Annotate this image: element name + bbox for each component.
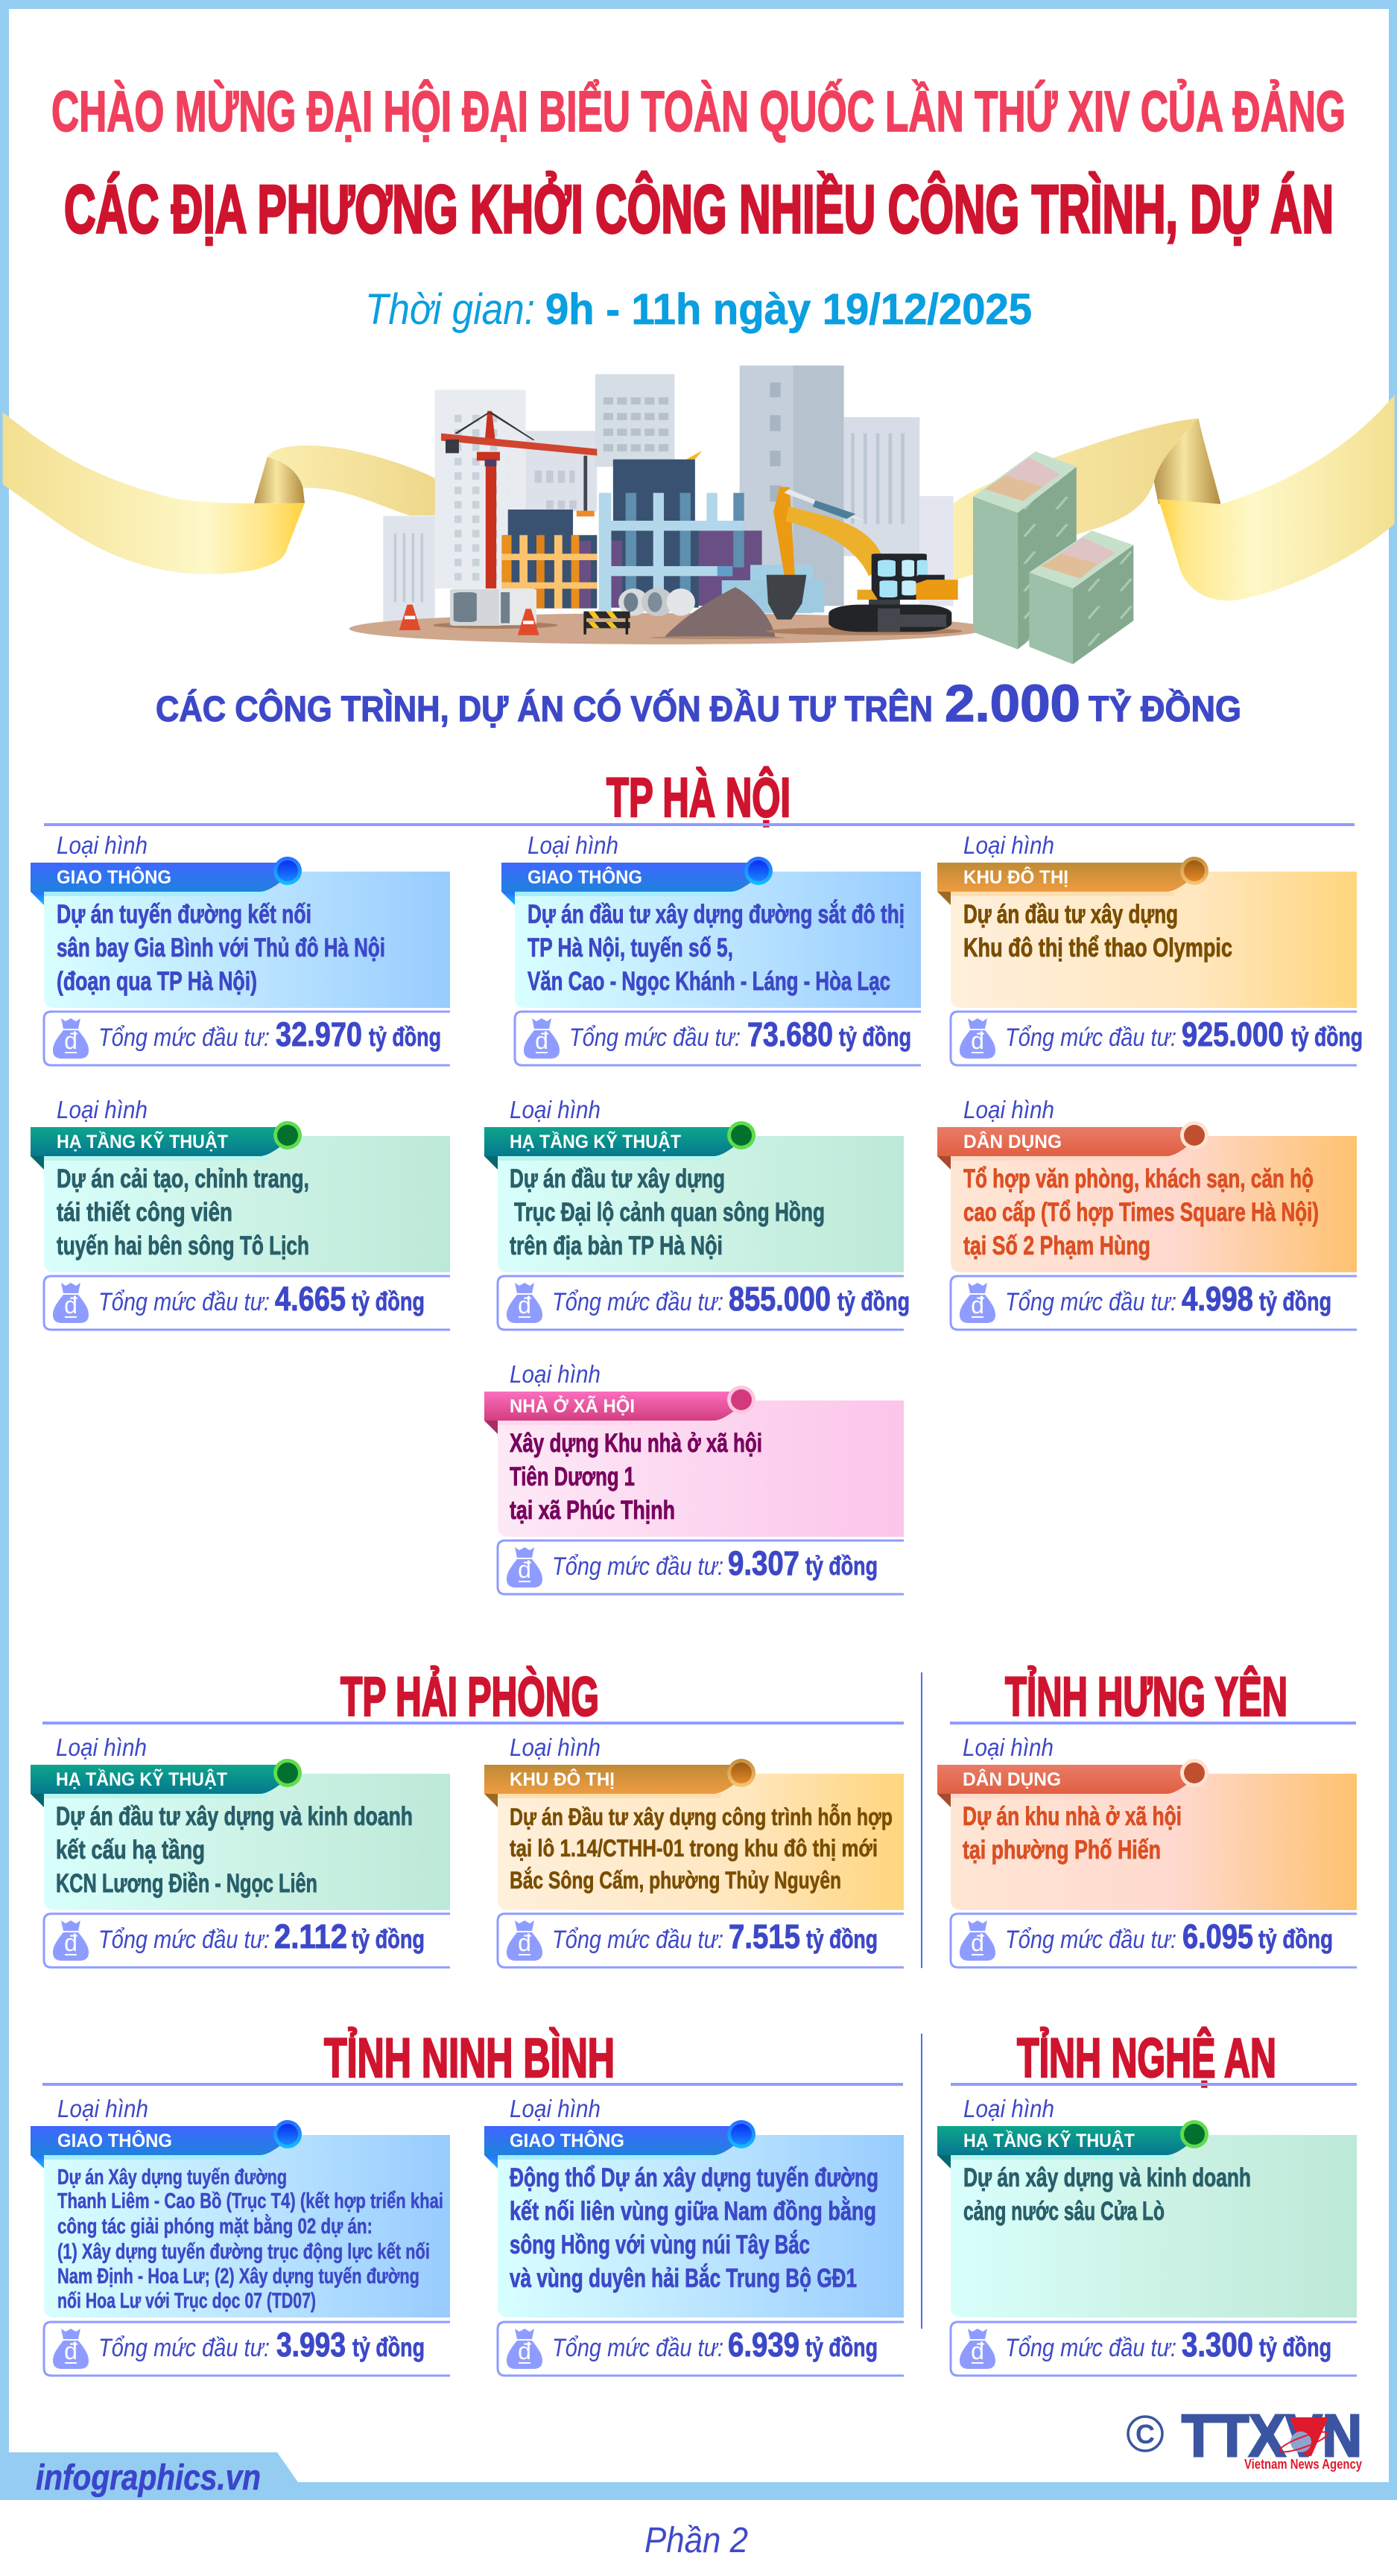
tag: DÂN DỤNG: [963, 1768, 1061, 1790]
project description: kết cấu hạ tầng: [56, 1836, 205, 1865]
total investment: tỷ đồng: [1259, 2333, 1331, 2362]
card: khu đô thị, Bắc Sông Cấm: [484, 1733, 904, 1967]
project description: (1) Xây dựng tuyến đường trục động lực kết nối: [57, 2240, 430, 2264]
total investment: [44, 1012, 450, 1065]
project description: Tiên Dương 1: [510, 1462, 635, 1491]
project description: Dự án đầu tư xây dựng: [510, 1164, 725, 1193]
project description: [57, 2166, 443, 2313]
illustration: ribbons, city construction site and money stacks: [3, 366, 1395, 664]
total investment: Tổng mức đầu tư:: [98, 1926, 270, 1954]
project description: Nam Định - Hoa Lư; (2) Xây dựng tuyến đường: [57, 2265, 419, 2288]
tag: [31, 857, 302, 905]
project description: Dự án đầu tư xây dựng và kinh doanh: [56, 1802, 413, 1831]
label: loại hình: Loại hình: [528, 831, 618, 859]
project description: TP Hà Nội, tuyến số 5,: [528, 933, 733, 962]
label: loại hình: Loại hình: [510, 1360, 601, 1388]
total investment: 6.939: [728, 2326, 799, 2364]
total investment: Tổng mức đầu tư:: [552, 1926, 723, 1954]
tag: [31, 2120, 302, 2169]
total investment: tỷ đồng: [352, 1925, 425, 1954]
logo: TTXVN: Vietnam News Agency: [1244, 2457, 1362, 2472]
total investment: [44, 2322, 450, 2376]
panel: [951, 2135, 1357, 2318]
total investment: tỷ đồng: [1258, 1925, 1333, 1954]
tag: HẠ TẦNG KỸ THUẬT: [56, 1768, 227, 1790]
total investment: [951, 2322, 1357, 2376]
project description: Dự án xây dựng và kinh doanh: [963, 2163, 1251, 2192]
total investment: 2.112: [274, 1917, 347, 1955]
total investment: đ: [64, 1929, 77, 1956]
total investment: 4.998: [1182, 1280, 1253, 1318]
total investment: [951, 1276, 1357, 1330]
label: loại hình: Loại hình: [510, 2095, 601, 2122]
total investment: 73.680: [747, 1015, 833, 1053]
label: loại hình: Loại hình: [963, 2095, 1054, 2122]
label: loại hình: Loại hình: [510, 1096, 601, 1123]
tag: [31, 1759, 302, 1807]
total investment: tỷ đồng: [805, 2333, 878, 2362]
tag: GIAO THÔNG: [57, 2129, 172, 2151]
card: hạ tầng kỹ thuật, sông Tô Lịch: [31, 1096, 450, 1330]
heading: TP Hà Nội: TP HÀ NỘI: [606, 767, 791, 828]
total investment: đ: [971, 1292, 984, 1319]
panel: [44, 1774, 450, 1910]
project description: Văn Cao - Ngọc Khánh - Láng - Hòa Lạc: [528, 967, 890, 996]
subheading: projects over 2,000 billion dong: TỶ ĐỒNG: [1089, 688, 1241, 729]
total investment: 6.095: [1182, 1917, 1253, 1955]
tag: [937, 1759, 1208, 1807]
project description: Khu đô thị thể thao Olympic: [963, 933, 1232, 962]
project description: sân bay Gia Bình với Thủ đô Hà Nội: [57, 933, 385, 962]
tag: [31, 1121, 302, 1170]
total investment: Tổng mức đầu tư:: [98, 2334, 270, 2362]
total investment: đ: [64, 2338, 77, 2364]
total investment: tỷ đồng: [806, 1925, 878, 1954]
total investment: [951, 1012, 1363, 1065]
total investment: tỷ đồng: [352, 1287, 425, 1316]
tag: NHÀ Ở XÃ HỘI: [510, 1395, 635, 1417]
project description: Dự án khu nhà ở xã hội: [963, 1802, 1182, 1831]
panel: [44, 872, 450, 1008]
label: loại hình: Loại hình: [57, 831, 148, 859]
panel: [515, 872, 921, 1008]
heading: TP Hải Phòng: TP HẢI PHÒNG: [340, 1666, 599, 1728]
total investment: đ: [64, 1027, 77, 1054]
card: hạ tầng kỹ thuật, trục đại lộ sông Hồng: [484, 1096, 910, 1330]
project description: [510, 2163, 878, 2293]
tag: [484, 1121, 755, 1170]
subheading: projects over 2,000 billion dong: [156, 674, 1241, 732]
subheading: projects over 2,000 billion dong: CÁC CÔNG TRÌNH, DỰ ÁN CÓ VỐN ĐẦU TƯ TRÊN: [156, 688, 933, 729]
project description: (đoạn qua TP Hà Nội): [57, 967, 257, 996]
project description: cảng nước sâu Cửa Lò: [963, 2197, 1165, 2226]
tag: GIAO THÔNG: [57, 866, 171, 888]
project description: tại xã Phúc Thịnh: [510, 1496, 675, 1525]
total investment: 855.000: [729, 1280, 831, 1318]
tag: [484, 1386, 755, 1434]
panel: [44, 1136, 450, 1272]
project description: công tác giải phóng mặt bằng 02 dự án:: [57, 2213, 373, 2239]
project description: Dự án tuyến đường kết nối: [57, 900, 311, 929]
project description: kết nối liên vùng giữa Nam đồng bằng: [510, 2196, 876, 2226]
total investment: Tổng mức đầu tư:: [1005, 1926, 1176, 1954]
tag: [484, 1759, 755, 1807]
project description: tuyến hai bên sông Tô Lịch: [57, 1231, 309, 1260]
total investment: tỷ đồng: [805, 1552, 878, 1581]
project description: [528, 899, 905, 996]
total investment: Tổng mức đầu tư:: [552, 1288, 723, 1316]
label: loại hình: Loại hình: [963, 831, 1054, 859]
panel: [498, 1774, 904, 1910]
total investment: 3.300: [1182, 2326, 1253, 2364]
total investment: Tổng mức đầu tư:: [569, 1024, 741, 1052]
card: giao thông, sân bay Gia Bình: [31, 831, 450, 1065]
card: nhà ở xã hội Tiên Dương 1: [484, 1360, 904, 1594]
project description: [963, 900, 1232, 962]
total investment: 925.000: [1182, 1015, 1284, 1053]
project description: [963, 2163, 1251, 2226]
project description: [57, 1164, 309, 1260]
project description: Dự án Đầu tư xây dựng công trình hỗn hợp: [510, 1803, 893, 1830]
label: loại hình: Loại hình: [963, 1096, 1054, 1123]
total investment: [951, 1914, 1357, 1967]
project description: Bắc Sông Cấm, phường Thủy Nguyên: [510, 1867, 841, 1894]
card: giao thông, động thổ tuyến đường liên vùng: [484, 2095, 904, 2376]
total investment: tỷ đồng: [352, 2333, 425, 2362]
project description: tại Số 2 Phạm Hùng: [963, 1231, 1150, 1260]
total investment: Tổng mức đầu tư:: [98, 1288, 270, 1316]
total investment: tỷ đồng: [839, 1023, 911, 1052]
project description: tái thiết công viên: [57, 1198, 232, 1227]
panel: [951, 1774, 1357, 1910]
part label: Phần 2: [644, 2521, 748, 2560]
tag: HẠ TẦNG KỸ THUẬT: [57, 1130, 228, 1152]
total investment: đ: [518, 2338, 531, 2364]
project description: tại lô 1.14/CTHH-01 trong khu đô thị mới: [510, 1835, 878, 1862]
project description: [57, 900, 385, 996]
total investment: đ: [535, 1027, 548, 1054]
total investment: 32.970: [276, 1015, 362, 1053]
total investment: 4.665: [275, 1280, 346, 1318]
total investment: 9.307: [728, 1544, 799, 1582]
total investment: [515, 1012, 921, 1065]
project description: Động thổ Dự án xây dựng tuyến đường: [510, 2163, 878, 2192]
tag: [937, 857, 1208, 905]
footer: infographics.vn: infographics.vn: [36, 2458, 261, 2498]
panel: [498, 1136, 904, 1272]
tag: [501, 857, 773, 905]
label: loại hình: Loại hình: [963, 1733, 1054, 1761]
project description: nối Hoa Lư với Trục dọc 07 (TD07): [57, 2289, 316, 2313]
tag: GIAO THÔNG: [528, 866, 642, 888]
project description: KCN Lương Điền - Ngọc Liên: [56, 1869, 317, 1898]
total investment: Tổng mức đầu tư:: [552, 2334, 723, 2362]
tag: GIAO THÔNG: [510, 2129, 624, 2151]
project description: và vùng duyên hải Bắc Trung Bộ GĐ1: [510, 2263, 857, 2293]
label: loại hình: Loại hình: [510, 1733, 601, 1761]
tag: KHU ĐÔ THỊ: [963, 866, 1068, 888]
project description: tại phường Phố Hiến: [963, 1836, 1161, 1865]
tag: [937, 1121, 1208, 1170]
card: dân dụng, Times Square Hà Nội: [937, 1096, 1357, 1330]
project description: [963, 1164, 1319, 1260]
label: loại hình: Loại hình: [56, 1733, 147, 1761]
total investment: tỷ đồng: [1291, 1023, 1363, 1052]
total investment: [44, 1914, 450, 1967]
project description: sông Hồng với vùng núi Tây Bắc: [510, 2230, 810, 2259]
card: khu đô thị thể thao Olympic: [937, 831, 1363, 1065]
total investment: Tổng mức đầu tư:: [1005, 1024, 1176, 1052]
heading: Tỉnh Ninh Bình: TỈNH NINH BÌNH: [324, 2027, 615, 2089]
project description: Dự án đầu tư xây dựng đường sắt đô thị: [528, 899, 905, 929]
label: loại hình: Loại hình: [57, 2095, 148, 2122]
tag: [937, 2120, 1208, 2169]
total investment: đ: [518, 1556, 531, 1583]
tag: HẠ TẦNG KỸ THUẬT: [510, 1130, 681, 1152]
project description: Trục Đại lộ cảnh quan sông Hồng: [514, 1198, 825, 1227]
panel: [498, 2135, 904, 2318]
total investment: đ: [971, 1027, 984, 1054]
project description: [510, 1164, 825, 1260]
time line: 9h - 11h ngày 19/12/2025: [545, 285, 1032, 334]
copyright mark: C: [1135, 2419, 1155, 2449]
total investment: Tổng mức đầu tư:: [98, 1024, 270, 1052]
total investment: [498, 2322, 904, 2376]
card: dân dụng, phường Phố Hiến: [937, 1733, 1357, 1967]
total investment: Tổng mức đầu tư:: [1005, 1288, 1176, 1316]
project description: Dự án Xây dựng tuyến đường: [57, 2166, 287, 2189]
panel: [951, 872, 1357, 1008]
total investment: 7.515: [729, 1917, 800, 1955]
total investment: tỷ đồng: [837, 1287, 910, 1316]
project description: [510, 1429, 762, 1525]
total investment: tỷ đồng: [1259, 1287, 1331, 1316]
total investment: Tổng mức đầu tư:: [1005, 2334, 1176, 2362]
total investment: [498, 1914, 904, 1967]
tag: DÂN DỤNG: [963, 1130, 1062, 1152]
panel: [44, 2135, 450, 2318]
card: hạ tầng kỹ thuật, KCN Lương Điền: [31, 1733, 450, 1967]
total investment: đ: [971, 1929, 984, 1956]
total investment: đ: [971, 2338, 984, 2364]
tag: HẠ TẦNG KỸ THUẬT: [963, 2129, 1135, 2151]
project description: Thanh Liêm - Cao Bồ (Trục T4) (kết hợp triển khai: [57, 2189, 443, 2213]
tag: KHU ĐÔ THỊ: [510, 1768, 615, 1790]
logo: TTXVN: TTXVN: [1182, 2402, 1362, 2469]
card: giao thông, đường sắt đô thị số 5: [501, 831, 921, 1065]
project description: [963, 1802, 1182, 1865]
total investment: đ: [518, 1292, 531, 1319]
project description: trên địa bàn TP Hà Nội: [510, 1231, 723, 1260]
panel: [498, 1400, 904, 1537]
project description: [56, 1802, 413, 1898]
total investment: [44, 1276, 450, 1330]
total investment: [498, 1276, 910, 1330]
card: hạ tầng kỹ thuật, cảng nước sâu Cửa Lò: [937, 2095, 1357, 2376]
copyright mark: [1128, 2417, 1162, 2451]
total investment: [498, 1541, 904, 1594]
panel: [951, 1136, 1357, 1272]
time line: Thời gian:: [365, 285, 535, 334]
project description: Dự án đầu tư xây dựng: [963, 900, 1178, 929]
tag: [484, 2120, 755, 2169]
total investment: đ: [518, 1929, 531, 1956]
label: loại hình: Loại hình: [57, 1096, 148, 1123]
total investment: đ: [64, 1292, 77, 1319]
subheading: projects over 2,000 billion dong: 2.000: [945, 674, 1080, 732]
total investment: Tổng mức đầu tư:: [552, 1552, 723, 1581]
project description: Xây dựng Khu nhà ở xã hội: [510, 1429, 762, 1458]
card: giao thông, Thanh Liêm - Cao Bồ: [31, 2095, 450, 2376]
project description: Dự án cải tạo, chỉnh trang,: [57, 1164, 309, 1193]
project description: [510, 1803, 893, 1894]
total investment: 3.993: [276, 2326, 346, 2364]
total investment: tỷ đồng: [369, 1023, 441, 1052]
